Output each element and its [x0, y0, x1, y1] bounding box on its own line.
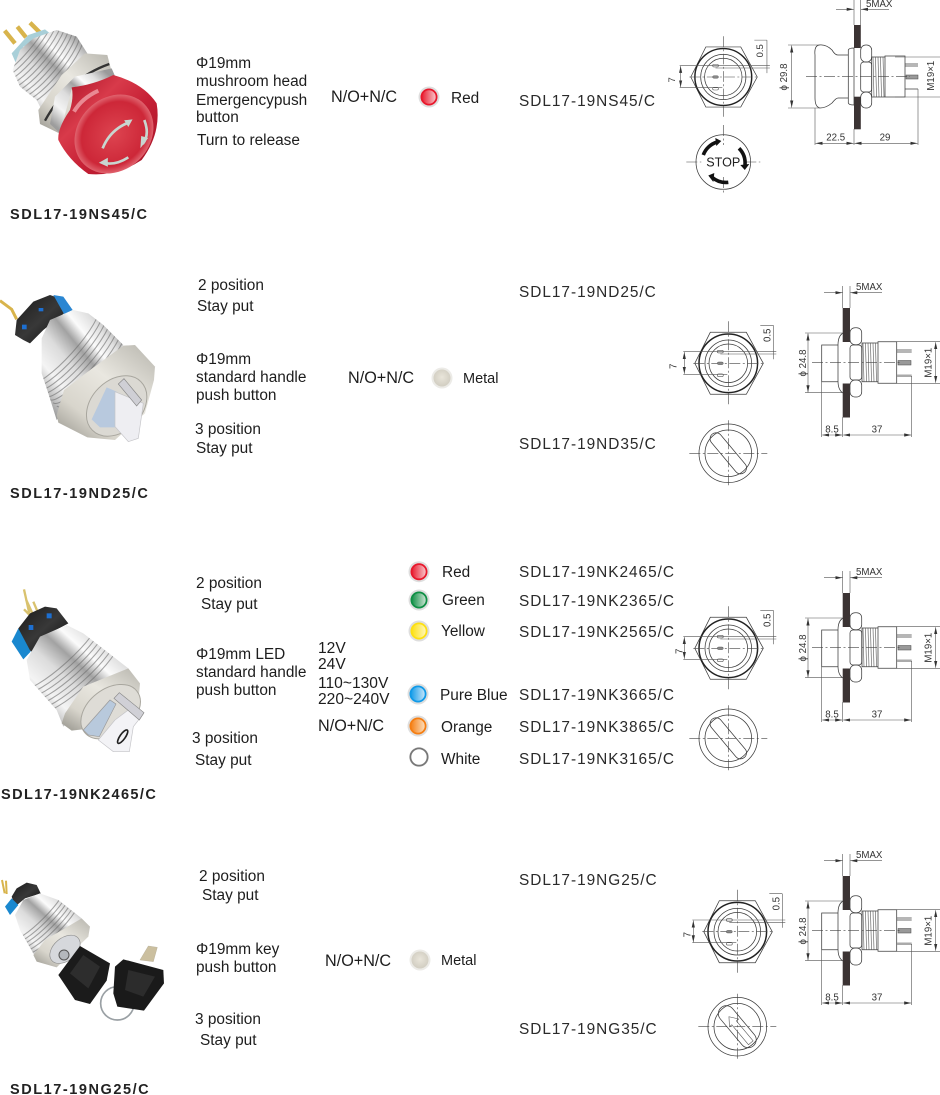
- colour label: Red: [442, 564, 470, 581]
- photo: standard handle push button: [0, 295, 159, 448]
- description: button: [196, 109, 239, 126]
- drawing: side view with dimensions: 8.5: [825, 425, 839, 436]
- description: handle: push button: [196, 387, 276, 404]
- drawing: side view with dimensions: 37: [872, 993, 882, 1004]
- description: key: push button: [196, 959, 276, 976]
- colour swatch: orange: [408, 716, 428, 736]
- colour label: Pure Blue: [440, 687, 508, 704]
- panel: row 4 key button: [2, 850, 940, 1095]
- drawing: rear view handle: [689, 420, 767, 486]
- model code: SDL17-19NS45/C: [519, 93, 656, 110]
- drawing: side view with dimensions: ϕ 29.8: [779, 64, 790, 90]
- product label: SDL17-19NK2465/C: [1, 787, 157, 803]
- photo: LED standard handle push button: [12, 589, 151, 752]
- panel: row 3 LED handle button: [1, 561, 940, 803]
- drawing: front view: 7: [682, 932, 693, 937]
- drawing: side view with dimensions: [798, 567, 940, 722]
- description: 3 position: Stay put: [200, 1032, 257, 1049]
- product label: SDL17-19NS45/C: [10, 207, 149, 223]
- description: 3 position: 3 position: [195, 1011, 261, 1028]
- contact type: N/O+N/C: [348, 369, 414, 387]
- drawing: side view with dimensions: 37: [872, 425, 882, 436]
- colour label: Yellow: [441, 623, 486, 640]
- drawing: side view with dimensions: M19×1: [924, 916, 934, 946]
- model code: SDL17-19NK2565/C: [519, 624, 675, 641]
- voltage list: 12V: [318, 640, 346, 657]
- description: handle: standard handle: [196, 369, 306, 386]
- drawing: front view: 7: [666, 77, 677, 83]
- colour swatch: metal: [432, 368, 452, 388]
- drawing: side view with dimensions: ϕ 24.8: [798, 918, 809, 944]
- panel: row 2 standard handle button: [0, 277, 940, 502]
- model code: SDL17-19NK3165/C: [519, 751, 675, 768]
- drawing: side view with dimensions: M19×1: [924, 348, 934, 378]
- product label: SDL17-19ND25/C: [10, 486, 149, 502]
- colour label: Metal: [463, 371, 498, 387]
- voltage list: 110~130V: [318, 675, 389, 692]
- colour label: White: [441, 751, 480, 768]
- drawing: side view with dimensions: 8.5: [825, 710, 839, 721]
- colour swatch: pure blue: [408, 684, 428, 704]
- description: 3 position: 3 position: [195, 421, 261, 438]
- drawing: side view with dimensions: M19×1: [924, 633, 934, 663]
- colour swatch: red: [408, 561, 430, 582]
- drawing: side view with dimensions: 22.5: [826, 132, 845, 144]
- drawing: side view with dimensions: [798, 282, 940, 437]
- drawing: STOP rear view: [686, 125, 760, 195]
- panel: row 1 mushroom head button: [0, 0, 940, 223]
- drawing: front view: [666, 36, 770, 118]
- model code: SDL17-19NG25/C: [519, 872, 658, 889]
- model code: SDL17-19NK3865/C: [519, 719, 675, 736]
- drawing: side view with dimensions: ϕ 24.8: [798, 350, 809, 376]
- model code: SDL17-19ND25/C: [519, 284, 657, 301]
- contact type: N/O+N/C: [331, 88, 397, 106]
- description: key: Φ19mm key: [196, 941, 280, 958]
- drawing: side view with dimensions: 5MAX: [856, 567, 883, 578]
- description: handle: Φ19mm: [196, 351, 251, 368]
- drawing: side view with dimensions: 37: [872, 710, 882, 721]
- colour swatch: white: [409, 747, 429, 767]
- description: 2 position: Stay put: [197, 298, 254, 315]
- drawing: front view: 0.5: [771, 897, 782, 910]
- colour label: Orange: [441, 719, 492, 736]
- description: 2 position: 2 position: [199, 868, 265, 885]
- colour swatch: red: [418, 86, 440, 108]
- description: LED handle: standard handle: [196, 664, 306, 681]
- drawing: rear view key: [698, 994, 776, 1060]
- drawing: front view: [674, 606, 776, 690]
- model code: SDL17-19NK2365/C: [519, 593, 675, 610]
- description: 3 position: Stay put: [195, 752, 252, 769]
- description: 2 position: Stay put: [201, 596, 258, 613]
- voltage list: 24V: [318, 656, 346, 673]
- contact type: N/O+N/C: [318, 717, 384, 735]
- drawing: front view: 7: [668, 364, 679, 369]
- drawing: side view with dimensions: 8.5: [825, 993, 839, 1004]
- colour label: Metal: [441, 953, 476, 969]
- drawing: STOP rear view: STOP: [706, 156, 740, 170]
- drawing: side view with dimensions: 5MAX: [856, 282, 883, 293]
- description: 3 position: Stay put: [196, 440, 253, 457]
- drawing: front view: 7: [674, 649, 685, 654]
- description: 2 position: Stay put: [202, 887, 259, 904]
- description: 2 position: 2 position: [198, 277, 264, 294]
- drawing: front view: [682, 890, 785, 974]
- description: LED handle: push button: [196, 682, 276, 699]
- drawing: front view: 0.5: [754, 44, 765, 57]
- voltage list: 220~240V: [318, 691, 390, 708]
- drawing: side view with dimensions: 29: [880, 132, 890, 144]
- drawing: side view with dimensions: [779, 0, 940, 145]
- photo: key push button with two keys: [2, 880, 164, 1020]
- drawing: front view: 0.5: [762, 329, 773, 342]
- description: Φ19mm: [196, 55, 251, 72]
- description: Turn to release: [197, 132, 300, 149]
- description: 3 position: 3 position: [192, 730, 258, 747]
- colour swatch: yellow: [408, 620, 430, 642]
- model code: SDL17-19NG35/C: [519, 1021, 658, 1038]
- drawing: rear view handle: [689, 705, 767, 771]
- model code: SDL17-19NK3665/C: [519, 687, 675, 704]
- description: LED handle: Φ19mm LED: [196, 646, 285, 663]
- drawing: side view with dimensions: [798, 850, 940, 1005]
- contact type: N/O+N/C: [325, 952, 391, 970]
- description: Emergencypush: [196, 92, 307, 109]
- model code: SDL17-19ND35/C: [519, 436, 657, 453]
- model code: SDL17-19NK2465/C: [519, 564, 675, 581]
- drawing: front view: 0.5: [762, 614, 773, 627]
- description: mushroom head: [196, 73, 307, 90]
- description: 2 position: 2 position: [196, 575, 262, 592]
- colour swatch: green: [408, 590, 430, 610]
- drawing: side view with dimensions: ϕ 24.8: [798, 635, 809, 661]
- colour label: Green: [442, 592, 485, 609]
- colour swatch: metal: [410, 950, 430, 970]
- drawing: side view with dimensions: 5MAX: [856, 850, 883, 861]
- photo: red mushroom head push button: [3, 21, 158, 174]
- drawing: side view with dimensions: M19×1: [926, 61, 937, 91]
- drawing: front view: [668, 321, 776, 405]
- colour label: Red: [451, 90, 479, 107]
